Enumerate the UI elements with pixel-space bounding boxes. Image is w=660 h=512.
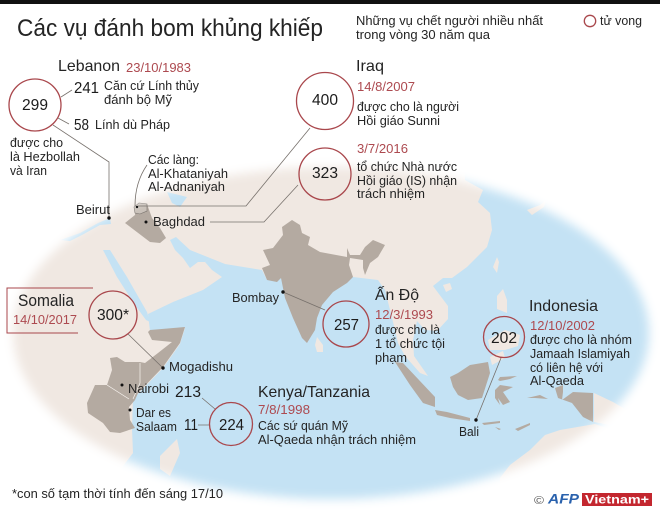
400 circle [296, 72, 354, 130]
subtitle: Những vụ chết người nhiều nhất [356, 13, 543, 28]
Dar es Salaam label: Salaam [136, 419, 177, 434]
Indonesia text: có liên hệ với [530, 360, 603, 375]
Lebanon total circle: 299 [22, 97, 48, 114]
Somalia box [7, 288, 93, 333]
panel: Kenya/Tanzania [175, 384, 416, 447]
villages label [135, 152, 228, 208]
Indonesia text: Jamaah Islamiyah [530, 346, 630, 361]
India text: 1 tổ chức tội [375, 336, 445, 351]
323 circle: 323 [312, 165, 338, 182]
panel: Iraq [296, 58, 459, 201]
copyright symbol: © [534, 495, 544, 507]
323 circle [299, 148, 351, 200]
Bali label [459, 358, 501, 439]
villages label: Các làng: [148, 152, 199, 167]
title: Các vụ đánh bom khủng khiếp [17, 15, 323, 42]
300 circle: 300* [97, 307, 129, 324]
Mogadishu label: Mogadishu [169, 359, 233, 374]
Iraq 2007 text [357, 79, 459, 128]
Lebanon description [10, 135, 80, 178]
seas: Mediterranean, Red Sea, Persian Gulf, Caspian [60, 192, 210, 322]
Iraq 2016 text: tổ chức Nhà nước [357, 159, 457, 174]
400 circle: 400 [312, 92, 338, 109]
Iraq 2016 text: Hồi giáo (IS) nhận [357, 173, 457, 188]
world map [10, 164, 654, 504]
Iraq 2007 text: Hồi giáo Sunni [357, 113, 440, 128]
Iraq [125, 204, 166, 243]
Lebanon heading: Lebanon [58, 58, 120, 75]
Vietnam+ logo: Vietnam+ [585, 492, 649, 506]
panel: India [323, 285, 445, 365]
footnote: *con số tạm thời tính đến sáng 17/10 [12, 486, 223, 501]
Bali label: Bali [459, 424, 479, 439]
Indonesia [395, 362, 593, 431]
Lebanon breakdown: Lính dù Pháp [95, 117, 170, 132]
Iraq 2016 text: 3/7/2016 [357, 141, 408, 156]
Lebanon breakdown [58, 78, 199, 134]
Iraq heading: Iraq [356, 58, 384, 75]
Dar es Salaam label: Dar es [136, 405, 171, 420]
Kenya/Tanzania text: Al-Qaeda nhận trách nhiệm [258, 432, 416, 447]
Kenya/Tanzania text: 7/8/1998 [258, 402, 310, 417]
Lebanon breakdown: 241 [74, 80, 99, 97]
Iraq 2016 text: trách nhiệm [357, 186, 425, 201]
legend: tử vong [600, 13, 642, 28]
leader line: 323 to Baghdad [210, 185, 298, 222]
India heading: Ấn Độ [375, 285, 419, 304]
Lebanon description: và Iran [10, 163, 47, 178]
panel: Lebanon [9, 58, 199, 178]
Kenya/Tanzania breakdown: 11 [184, 417, 198, 434]
Indonesia text: được cho là nhóm [530, 332, 632, 347]
202 circle [484, 316, 524, 358]
Indonesia text: 12/10/2002 [530, 318, 595, 333]
top black bar [0, 0, 660, 4]
subtitle: trong vòng 30 năm qua [356, 27, 491, 42]
224 circle: 224 [219, 417, 244, 434]
land: Malay islands north Borneo and Mindanao [488, 330, 520, 350]
Kenya/Tanzania heading: Kenya/Tanzania [258, 384, 370, 401]
credit logos [534, 490, 652, 507]
Baghdad label: Baghdad [153, 214, 205, 229]
Bombay label: Bombay [232, 290, 279, 305]
Iraq 2016 text [357, 141, 457, 201]
Indonesia text: Al-Qaeda [530, 373, 585, 388]
land: Madagascar, Sri Lanka, Hainan, Taiwan, Philippines, Japan, Australia, New Guinea east [160, 204, 621, 478]
Iraq 2007 text: được cho là người [357, 99, 459, 114]
panel: Indonesia [484, 298, 632, 388]
India text: được cho là [375, 322, 441, 337]
India text: phạm [375, 350, 407, 365]
India text [375, 307, 445, 365]
Kenya/Tanzania text: Các sứ quán Mỹ [258, 418, 348, 433]
East Africa: Somalia, Ethiopia, Kenya, Tanzania [87, 327, 185, 433]
Lebanon breakdown: Căn cứ Lính thủy [104, 78, 199, 93]
villages label: Al-Adnaniyah [148, 179, 225, 194]
leader line: 400 to villages [138, 128, 310, 206]
Lebanon description: là Hezbollah [10, 149, 80, 164]
202 circle: 202 [491, 330, 517, 347]
Kenya/Tanzania text [258, 402, 416, 447]
Indonesia heading: Indonesia [529, 298, 598, 315]
land: Africa, Middle East and Asia [9, 163, 492, 464]
Lebanon breakdown: 58 [74, 117, 89, 134]
Iraq 2007 text: 14/8/2007 [357, 79, 415, 94]
Somalia date: 14/10/2017 [13, 312, 77, 327]
Mogadishu label [128, 334, 233, 374]
Lebanon breakdown: đánh bộ Mỹ [104, 92, 172, 107]
subtitle [356, 13, 543, 42]
Somalia heading: Somalia [18, 292, 75, 310]
Lebanon total circle [9, 79, 61, 131]
Nairobi label: Nairobi [128, 381, 169, 396]
Lebanon description: được cho [10, 135, 63, 150]
leader line: Beirut: Beirut [76, 202, 110, 217]
257 circle: 257 [334, 317, 359, 334]
India text: 12/3/1993 [375, 307, 433, 322]
panel: Somalia [7, 288, 137, 339]
Dar es Salaam label [128, 405, 177, 434]
Kenya/Tanzania breakdown: 213 [175, 384, 201, 401]
Iraqi villages area [134, 203, 147, 214]
villages label: Al-Khataniyah [148, 166, 228, 181]
224 circle [210, 402, 252, 446]
Bombay label [232, 290, 325, 310]
AFP logo: AFP [547, 490, 580, 506]
India [262, 220, 385, 343]
Lebanon date: 23/10/1983 [126, 60, 191, 75]
leader line: Beirut [53, 125, 111, 220]
Indonesia text [530, 318, 632, 388]
Kenya/Tanzania breakdown [175, 384, 215, 434]
East African borders [107, 363, 140, 399]
